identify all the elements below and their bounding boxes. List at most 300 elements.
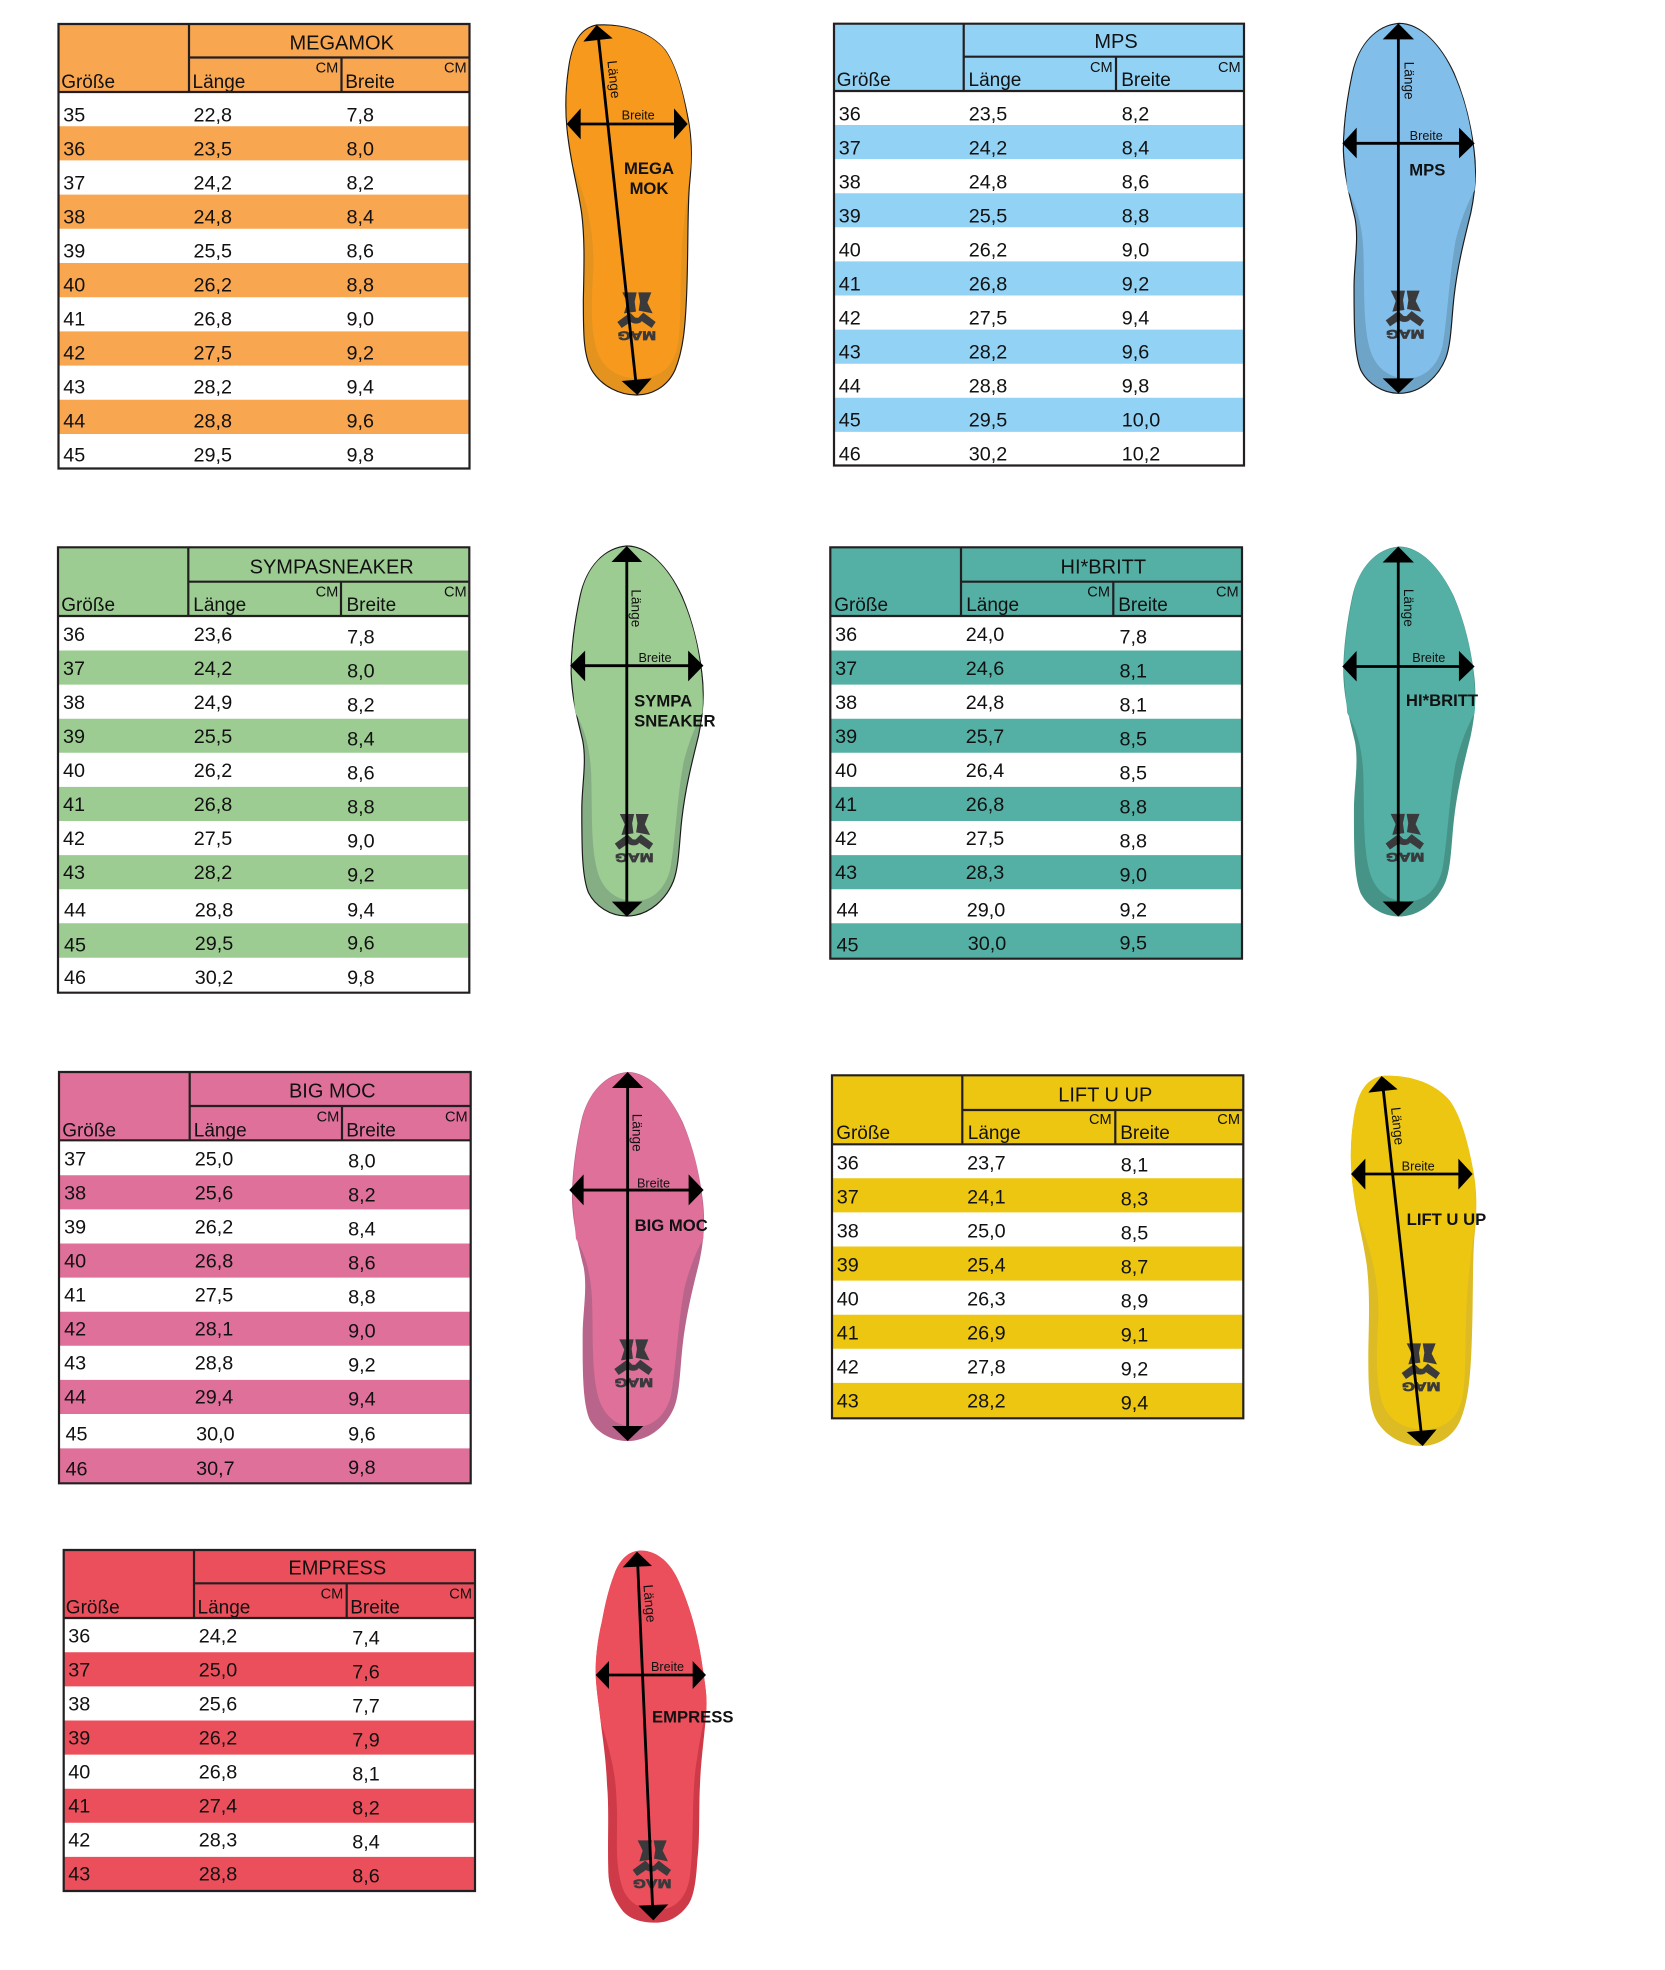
heading: EMPRESS: EMPRESS: [288, 1557, 386, 1579]
size rows: 26,8: [195, 1251, 233, 1273]
heading: LIFT U UP: LIFT U UP: [1058, 1085, 1152, 1107]
size rows: 8,0: [347, 660, 375, 682]
size rows: 8,6: [348, 1253, 376, 1275]
size rows: 23,7: [967, 1152, 1006, 1174]
size rows: 28,8: [969, 376, 1007, 398]
icon: MAG logo: MAG: [618, 329, 656, 343]
size rows: 42: [839, 308, 861, 330]
size rows: 38: [63, 206, 85, 228]
size rows: 25,0: [195, 1149, 233, 1171]
arrow: Länge: [623, 1552, 668, 1920]
size rows: 29,0: [967, 900, 1005, 922]
size rows: 25,5: [969, 206, 1007, 228]
size rows: 30,2: [969, 444, 1007, 466]
size rows: 9,6: [347, 932, 375, 954]
size rows: 30,7: [196, 1458, 235, 1480]
size rows: 25,5: [194, 726, 232, 748]
size rows: 9,0: [1122, 240, 1149, 262]
size rows: 9,8: [347, 444, 374, 466]
size rows: 26,3: [967, 1288, 1006, 1310]
column headers: Länge: [198, 1597, 250, 1618]
size rows: 8,1: [1121, 1154, 1148, 1176]
table: SYMPASNEAKER: [58, 547, 469, 993]
size rows: 37: [839, 138, 861, 160]
size rows: 43: [63, 862, 85, 884]
label: BIG MOC: BIG MOC: [635, 1216, 708, 1235]
column headers: CM: [445, 1109, 468, 1125]
column headers: Größe: [837, 70, 891, 91]
size rows: [64, 1149, 376, 1481]
size rows: 46: [839, 444, 861, 466]
size rows: 27,5: [966, 828, 1004, 850]
size rows: 9,4: [1121, 1392, 1148, 1414]
insole: EMPRESS: [596, 1551, 733, 1923]
size rows: 8,1: [1119, 660, 1147, 682]
insole: MPS: [1342, 23, 1475, 393]
size rows: 42: [837, 1356, 859, 1378]
size rows: 41: [835, 794, 857, 816]
arrow: Länge: [1368, 1076, 1437, 1446]
arrow: Länge: [611, 546, 642, 917]
column headers: Größe: [66, 1597, 120, 1618]
label: Länge: Länge: [1388, 1106, 1407, 1146]
column headers: Breite: [345, 72, 395, 93]
size rows: 7,4: [352, 1628, 380, 1650]
size rows: 45: [63, 444, 85, 466]
size rows: 8,0: [348, 1151, 376, 1173]
column headers: CM: [316, 585, 338, 601]
size rows: 44: [64, 1387, 86, 1409]
column headers: CM: [1216, 585, 1239, 601]
size rows: 25,0: [967, 1220, 1006, 1242]
label: Länge: Länge: [1401, 589, 1416, 627]
size rows: 46: [64, 967, 86, 989]
size rows: 44: [64, 900, 86, 922]
size rows: 9,0: [347, 308, 374, 330]
label: MEGA MOK: MOK: [630, 179, 668, 198]
size rows: [837, 1152, 1148, 1414]
size rows: 39: [837, 1254, 859, 1276]
size rows: 9,2: [1119, 900, 1147, 922]
size rows: 36: [63, 138, 85, 160]
size rows: 43: [63, 376, 85, 398]
column headers: CM: [1090, 60, 1113, 76]
size rows: 25,0: [199, 1660, 237, 1682]
size rows: 42: [64, 1319, 86, 1341]
label: SYMPA SNEAKER: SNEAKER: [634, 712, 716, 731]
size rows: 8,6: [352, 1866, 380, 1888]
size rows: 40: [63, 760, 85, 782]
label: Breite: Breite: [637, 1176, 670, 1190]
size rows: 26,2: [193, 274, 232, 296]
size rows: 26,8: [966, 794, 1004, 816]
size rows: 27,5: [195, 1285, 233, 1307]
column headers: Länge: [193, 595, 246, 616]
size rows: [63, 624, 375, 989]
size rows: 24,8: [966, 692, 1004, 714]
label: HI*BRITT: HI*BRITT: [1406, 691, 1478, 710]
size rows: 46: [65, 1459, 88, 1481]
size rows: 23,6: [194, 624, 232, 646]
size rows: 8,4: [352, 1832, 380, 1854]
size rows: 9,6: [1122, 342, 1149, 364]
size rows: 9,5: [1119, 932, 1147, 954]
size rows: 35: [63, 104, 85, 126]
size rows: 28,8: [193, 410, 232, 432]
column headers: [61, 585, 467, 616]
size rows: 8,6: [347, 762, 375, 784]
size rows: 36: [835, 624, 857, 646]
size rows: 24,6: [966, 658, 1004, 680]
arrow: Breite: [1351, 1159, 1473, 1190]
size rows: 9,0: [1119, 864, 1147, 886]
column headers: CM: [1217, 1112, 1240, 1128]
size rows: 9,2: [347, 864, 375, 886]
size rows: 24,8: [193, 206, 232, 228]
column headers: Länge: [966, 595, 1019, 616]
size rows: 24,8: [969, 172, 1007, 194]
label: Länge: Länge: [640, 1584, 659, 1623]
size rows: 43: [837, 1390, 859, 1412]
size rows: 8,6: [347, 240, 374, 262]
icon: MAG logo: MAG: [633, 1877, 671, 1891]
size rows: 7,8: [347, 626, 375, 648]
size rows: 8,8: [1119, 830, 1147, 852]
column headers: CM: [444, 61, 467, 77]
size rows: 28,2: [193, 376, 232, 398]
heading: HI*BRITT: HI*BRITT: [1061, 556, 1146, 578]
size rows: 8,7: [1121, 1256, 1148, 1278]
size rows: 42: [68, 1830, 90, 1852]
column headers: Breite: [346, 1121, 396, 1142]
size rows: 26,4: [966, 760, 1004, 782]
label: Länge: Länge: [630, 1114, 645, 1152]
icon: MAG logo: MAG: [615, 850, 653, 864]
size rows: 8,8: [347, 274, 374, 296]
size rows: 9,8: [347, 967, 375, 989]
column headers: Breite: [1120, 1123, 1170, 1144]
size rows: 39: [63, 240, 85, 262]
size rows: 40: [837, 1288, 859, 1310]
size rows: 8,2: [352, 1798, 380, 1820]
size rows: 25,7: [966, 726, 1004, 748]
size rows: 41: [64, 1285, 86, 1307]
table: BIG MOC: [59, 1072, 471, 1483]
size rows: [839, 104, 1160, 466]
size rows: 24,0: [966, 624, 1004, 646]
size rows: 39: [68, 1728, 90, 1750]
size rows: 26,2: [969, 240, 1007, 262]
size rows: 36: [68, 1626, 90, 1648]
icon: MAG logo: MAG: [1386, 327, 1424, 341]
label: Länge: Länge: [604, 60, 623, 99]
label: SYMPA SNEAKER: SYMPA: [634, 692, 692, 711]
size rows: 7,8: [1119, 626, 1147, 648]
size rows: 30,0: [196, 1424, 235, 1446]
column headers: Größe: [834, 595, 888, 616]
column headers: CM: [321, 1586, 343, 1602]
size rows: 45: [64, 934, 86, 956]
size rows: 9,4: [347, 376, 374, 398]
size rows: 39: [835, 726, 857, 748]
arrow: Länge: [1383, 23, 1414, 393]
size rows: 38: [835, 692, 857, 714]
arrow: Breite: [570, 651, 703, 681]
size rows: 30,0: [968, 933, 1006, 955]
size rows: 41: [63, 308, 85, 330]
arrow: Breite: [596, 1661, 706, 1689]
size rows: 25,5: [193, 240, 232, 262]
size rows: 37: [63, 172, 85, 194]
size rows: 8,8: [1122, 206, 1149, 228]
size rows: 25,6: [199, 1694, 237, 1716]
icon: MAG logo: [1402, 1343, 1440, 1394]
size rows: 7,6: [352, 1662, 380, 1684]
table: MEGAMOK: [58, 24, 470, 468]
size rows: 9,2: [348, 1355, 376, 1377]
icon: MAG logo: [1386, 814, 1424, 864]
column headers: Größe: [836, 1123, 890, 1144]
size rows: 7,9: [352, 1730, 380, 1752]
size rows: 24,2: [969, 138, 1007, 160]
label: Breite: Breite: [638, 651, 672, 665]
size rows: 40: [63, 274, 85, 296]
size rows: 24,2: [193, 172, 232, 194]
size rows: 28,2: [967, 1390, 1006, 1412]
size rows: 26,2: [194, 760, 232, 782]
label: Breite: Breite: [651, 1660, 684, 1674]
size rows: 29,5: [195, 933, 233, 955]
size rows: 28,2: [969, 342, 1007, 364]
column headers: [61, 61, 467, 93]
size rows: 26,8: [193, 308, 232, 330]
size rows: 8,2: [1122, 104, 1149, 126]
insole: SYMPASNEAKER: [570, 546, 716, 917]
size rows: 28,1: [195, 1319, 233, 1341]
size rows: 41: [837, 1322, 859, 1344]
size rows: 37: [837, 1186, 859, 1208]
label: LIFT U UP: LIFT U UP: [1407, 1210, 1486, 1229]
size rows: 43: [64, 1353, 86, 1375]
size rows: [63, 104, 374, 466]
icon: MAG logo: [614, 1339, 653, 1390]
size rows: 8,5: [1119, 762, 1147, 784]
icon: MAG logo: [617, 292, 656, 343]
size rows: 45: [837, 935, 859, 957]
size rows: 41: [68, 1796, 90, 1818]
size rows: 26,2: [199, 1728, 237, 1750]
heading: BIG MOC: BIG MOC: [289, 1081, 376, 1103]
size rows: 9,4: [1122, 308, 1149, 330]
column headers: CM: [1089, 1112, 1112, 1128]
column headers: Breite: [350, 1597, 400, 1618]
size rows: 36: [63, 624, 85, 646]
size rows: 44: [839, 376, 861, 398]
size rows: 8,2: [347, 172, 374, 194]
label: MEGA MOK: MEGA: [624, 159, 674, 178]
size rows: 8,9: [1121, 1290, 1148, 1312]
size rows: 22,8: [193, 104, 232, 126]
size rows: 9,2: [1121, 1358, 1148, 1380]
size rows: 37: [835, 658, 857, 680]
size rows: 8,3: [1121, 1188, 1148, 1210]
size rows: 7,7: [352, 1696, 380, 1718]
size rows: 30,2: [195, 967, 233, 989]
size rows: 9,2: [347, 342, 374, 364]
size rows: 28,2: [194, 862, 232, 884]
size rows: 43: [68, 1864, 90, 1886]
size rows: 27,5: [969, 308, 1007, 330]
size rows: 8,8: [347, 796, 375, 818]
size rows: 8,8: [348, 1287, 376, 1309]
size rows: 36: [837, 1152, 859, 1174]
size rows: 8,2: [348, 1185, 376, 1207]
size rows: 27,5: [194, 828, 232, 850]
size rows: 8,4: [347, 206, 374, 228]
size rows: 42: [835, 828, 857, 850]
column headers: CM: [1087, 585, 1110, 601]
size rows: 9,4: [347, 900, 375, 922]
size rows: 29,5: [969, 410, 1007, 432]
size rows: 9,6: [347, 410, 374, 432]
size rows: 8,0: [347, 138, 374, 160]
insole: HI*BRITT: [1342, 547, 1478, 916]
column headers: Länge: [194, 1121, 247, 1142]
size rows: 39: [63, 726, 85, 748]
column headers: Länge: [968, 70, 1021, 91]
size rows: 8,5: [1121, 1222, 1148, 1244]
size rows: 29,5: [193, 444, 232, 466]
column headers: Breite: [1118, 595, 1168, 616]
size rows: 24,2: [194, 658, 232, 680]
size rows: 8,2: [347, 694, 375, 716]
arrow: Länge: [612, 1072, 643, 1441]
column headers: Größe: [61, 595, 115, 616]
column headers: [66, 1586, 472, 1618]
label: MPS: MPS: [1409, 161, 1445, 180]
size rows: 8,5: [1119, 728, 1147, 750]
size rows: 38: [63, 692, 85, 714]
column headers: [834, 585, 1239, 616]
size rows: 28,3: [199, 1830, 237, 1852]
size rows: 42: [63, 342, 85, 364]
size rows: 44: [63, 410, 85, 432]
column headers: CM: [1218, 60, 1241, 76]
size rows: 43: [839, 342, 861, 364]
table: LIFT U UP: [832, 1075, 1243, 1418]
size rows: 28,8: [199, 1864, 237, 1886]
label: Breite: Breite: [622, 108, 655, 122]
size rows: 44: [837, 900, 859, 922]
size rows: 8,4: [1122, 138, 1149, 160]
size rows: 10,0: [1122, 410, 1160, 432]
size rows: 25,4: [967, 1254, 1006, 1276]
size rows: [68, 1626, 380, 1888]
heading: MEGAMOK: MEGAMOK: [289, 32, 395, 54]
size rows: 8,4: [348, 1219, 376, 1241]
size rows: 43: [835, 862, 857, 884]
size rows: 9,6: [348, 1424, 376, 1446]
column headers: CM: [449, 1586, 472, 1602]
size rows: 40: [64, 1251, 86, 1273]
column headers: Breite: [1121, 70, 1171, 91]
heading: MPS: MPS: [1094, 31, 1138, 53]
size rows: 9,0: [347, 830, 375, 852]
size rows: 8,4: [347, 728, 375, 750]
size rows: 9,8: [1122, 376, 1149, 398]
size rows: [835, 624, 1147, 957]
size rows: 23,5: [969, 104, 1007, 126]
icon: MAG logo: [615, 814, 653, 864]
size rows: 23,5: [193, 138, 232, 160]
icon: MAG logo: [633, 1840, 671, 1891]
column headers: Breite: [346, 595, 396, 616]
size rows: 24,9: [194, 692, 232, 714]
column headers: Größe: [61, 72, 115, 93]
size rows: 28,8: [195, 900, 233, 922]
arrow: Breite: [567, 108, 688, 139]
table: MPS: [834, 24, 1244, 466]
size rows: 9,8: [348, 1457, 376, 1479]
size rows: 45: [839, 410, 861, 432]
column headers: Länge: [192, 72, 245, 93]
size rows: 40: [835, 760, 857, 782]
icon: MAG logo: MAG: [1402, 1380, 1440, 1394]
size rows: 8,8: [1119, 796, 1147, 818]
size rows: 41: [63, 794, 85, 816]
size rows: 37: [64, 1149, 86, 1171]
size rows: 9,4: [348, 1389, 376, 1411]
label: Länge: Länge: [628, 589, 643, 627]
icon: MAG logo: MAG: [1386, 850, 1424, 864]
size rows: 27,4: [199, 1796, 237, 1818]
size rows: 7,8: [347, 104, 374, 126]
size rows: 42: [63, 828, 85, 850]
size rows: 28,8: [195, 1353, 233, 1375]
icon: MAG logo: MAG: [615, 1376, 653, 1390]
size rows: 26,2: [195, 1217, 233, 1239]
size rows: 28,3: [966, 862, 1004, 884]
size rows: 36: [839, 104, 861, 126]
icon: MAG logo: [1386, 291, 1424, 341]
size rows: 10,2: [1122, 444, 1160, 466]
table: HI*BRITT: [830, 547, 1242, 959]
arrow: Breite: [1342, 651, 1475, 682]
size rows: 39: [64, 1217, 86, 1239]
column headers: CM: [316, 61, 338, 77]
size rows: 8,1: [352, 1764, 380, 1786]
label: Breite: Breite: [1402, 1160, 1435, 1174]
size rows: 8,1: [1119, 694, 1147, 716]
size rows: 24,1: [967, 1186, 1006, 1208]
size rows: 27,8: [967, 1356, 1006, 1378]
size rows: 39: [839, 206, 861, 228]
size rows: 24,2: [199, 1626, 237, 1648]
size rows: 38: [64, 1183, 86, 1205]
size rows: 25,6: [195, 1183, 233, 1205]
column headers: Größe: [62, 1121, 116, 1142]
size rows: 40: [68, 1762, 90, 1784]
column headers: [837, 60, 1241, 91]
size rows: 38: [839, 172, 861, 194]
size rows: 37: [63, 658, 85, 680]
size rows: 37: [68, 1660, 90, 1682]
size rows: 29,4: [195, 1387, 233, 1409]
size rows: 9,0: [348, 1321, 376, 1343]
size rows: 41: [839, 274, 861, 296]
label: Breite: Breite: [1410, 129, 1443, 143]
label: Länge: Länge: [1402, 62, 1417, 100]
